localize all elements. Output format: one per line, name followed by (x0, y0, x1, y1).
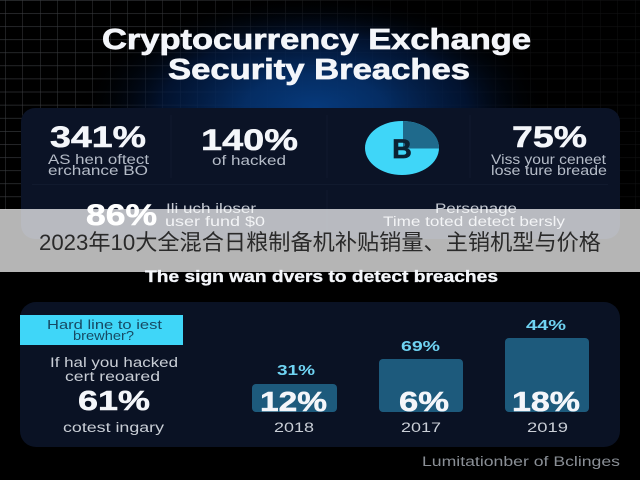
title: Security Breaches (168, 54, 470, 86)
stat: 86% (86, 199, 265, 232)
stat: 341%: 341% (50, 121, 146, 154)
stat: 75% (491, 121, 607, 178)
bar: 2019: 2019 (527, 419, 568, 435)
stat: 341%: erchance BO (48, 163, 148, 178)
caption banner: 2023年10大全混合日粮制备机补贴销量、主销机型与价格 (39, 230, 601, 255)
stat: detection time: Time toted detect bersly (383, 214, 565, 229)
title: Cryptocurrency Exchange (102, 24, 531, 56)
panel: key statistics (21, 108, 620, 239)
callout: question (20, 315, 183, 345)
bar: 2019: 44% (526, 317, 566, 334)
stat: 75%: lose ture breade (491, 163, 607, 178)
bar: 2018: 31% (277, 362, 315, 379)
bar: 2017: 6% (399, 386, 449, 417)
bar: 2019: 18% (512, 386, 580, 417)
title (102, 24, 531, 86)
stat: 86%: user fund $0 (165, 214, 265, 229)
stat: 341%: AS hen oftect (48, 152, 149, 167)
section heading: The sign wan dvers to detect breaches (145, 268, 498, 286)
stat: 140% (201, 124, 298, 168)
bar: 2018: 2018 (274, 419, 314, 435)
stat: 61%: cotest ingary (63, 420, 164, 435)
stat: 61%: cert reoared (65, 369, 160, 384)
stat: 61%: 61% (78, 385, 150, 416)
stat: detection time (383, 201, 565, 229)
bar: 2018: 12% (260, 386, 327, 417)
stat: 75%: 75% (512, 121, 587, 154)
icon: bitcoin pie chart (365, 121, 439, 175)
stat: 86%: Ili uch iloser (166, 201, 257, 216)
stat: 75%: Viss your ceneet (491, 152, 606, 167)
stat: detection time: Persenage (435, 201, 517, 216)
bar: 2018 (252, 362, 337, 435)
bar: 2017 (379, 338, 463, 435)
bar: 2017: 69% (401, 338, 440, 355)
caption banner (0, 209, 640, 272)
callout: question: brewher? (73, 328, 134, 343)
bar: 2019 (505, 317, 589, 435)
bar: 2017: 2017 (401, 419, 441, 435)
bar chart (252, 317, 589, 435)
stat: 140%: 140% (201, 124, 298, 157)
stat: 341% (48, 121, 149, 178)
callout: question: Hard line to iest (47, 317, 162, 332)
stat: 61% (50, 355, 178, 435)
icon: bitcoin pie chart: B (392, 134, 412, 164)
panel: breach detection (20, 302, 620, 447)
stat: 61%: If hal you hacked (50, 355, 178, 370)
footer source: Lumitationber of Bclinges (422, 454, 620, 469)
stat: 140%: of hacked (212, 153, 286, 168)
stat: 86%: 86% (86, 199, 157, 232)
